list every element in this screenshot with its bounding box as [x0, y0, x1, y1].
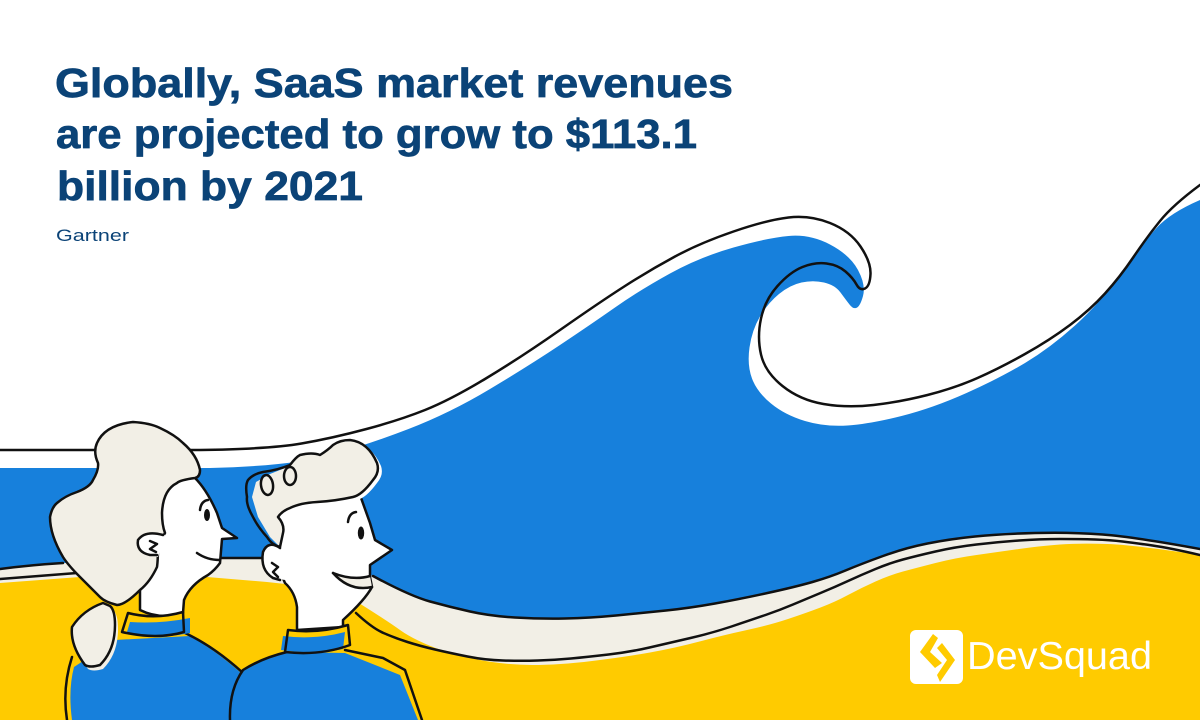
title: Globally, SaaS market revenues: [55, 60, 733, 106]
cream foam band: [0, 533, 1200, 720]
man body: [230, 650, 422, 720]
title: are projected to grow to $113.1: [56, 111, 697, 157]
foam band outlines: [0, 533, 1200, 661]
woman body: [65, 633, 242, 720]
woman eye and smile: [197, 500, 220, 560]
man collar: [281, 625, 350, 653]
title: [55, 60, 733, 209]
source: Gartner: Gartner: [56, 226, 129, 245]
woman collar: [122, 612, 190, 636]
man mouth: [333, 573, 372, 588]
man ear: [262, 545, 285, 580]
man figure: [230, 440, 422, 720]
woman face: [140, 465, 237, 616]
blue wave: [0, 200, 1200, 640]
DevSquad logo: [910, 630, 1152, 684]
wave outline: [0, 185, 1200, 450]
woman figure: [50, 422, 242, 720]
man eye and brow: [348, 512, 364, 540]
man hair: [246, 440, 382, 550]
logo icon: [910, 630, 963, 684]
woman hair: [50, 422, 200, 605]
logo wordmark: DevSquad: [967, 635, 1152, 678]
yellow sand: [0, 544, 1200, 720]
woman ear: [138, 533, 165, 557]
woman ponytail: [72, 603, 118, 670]
title: billion by 2021: [57, 163, 363, 209]
man face: [275, 488, 392, 630]
